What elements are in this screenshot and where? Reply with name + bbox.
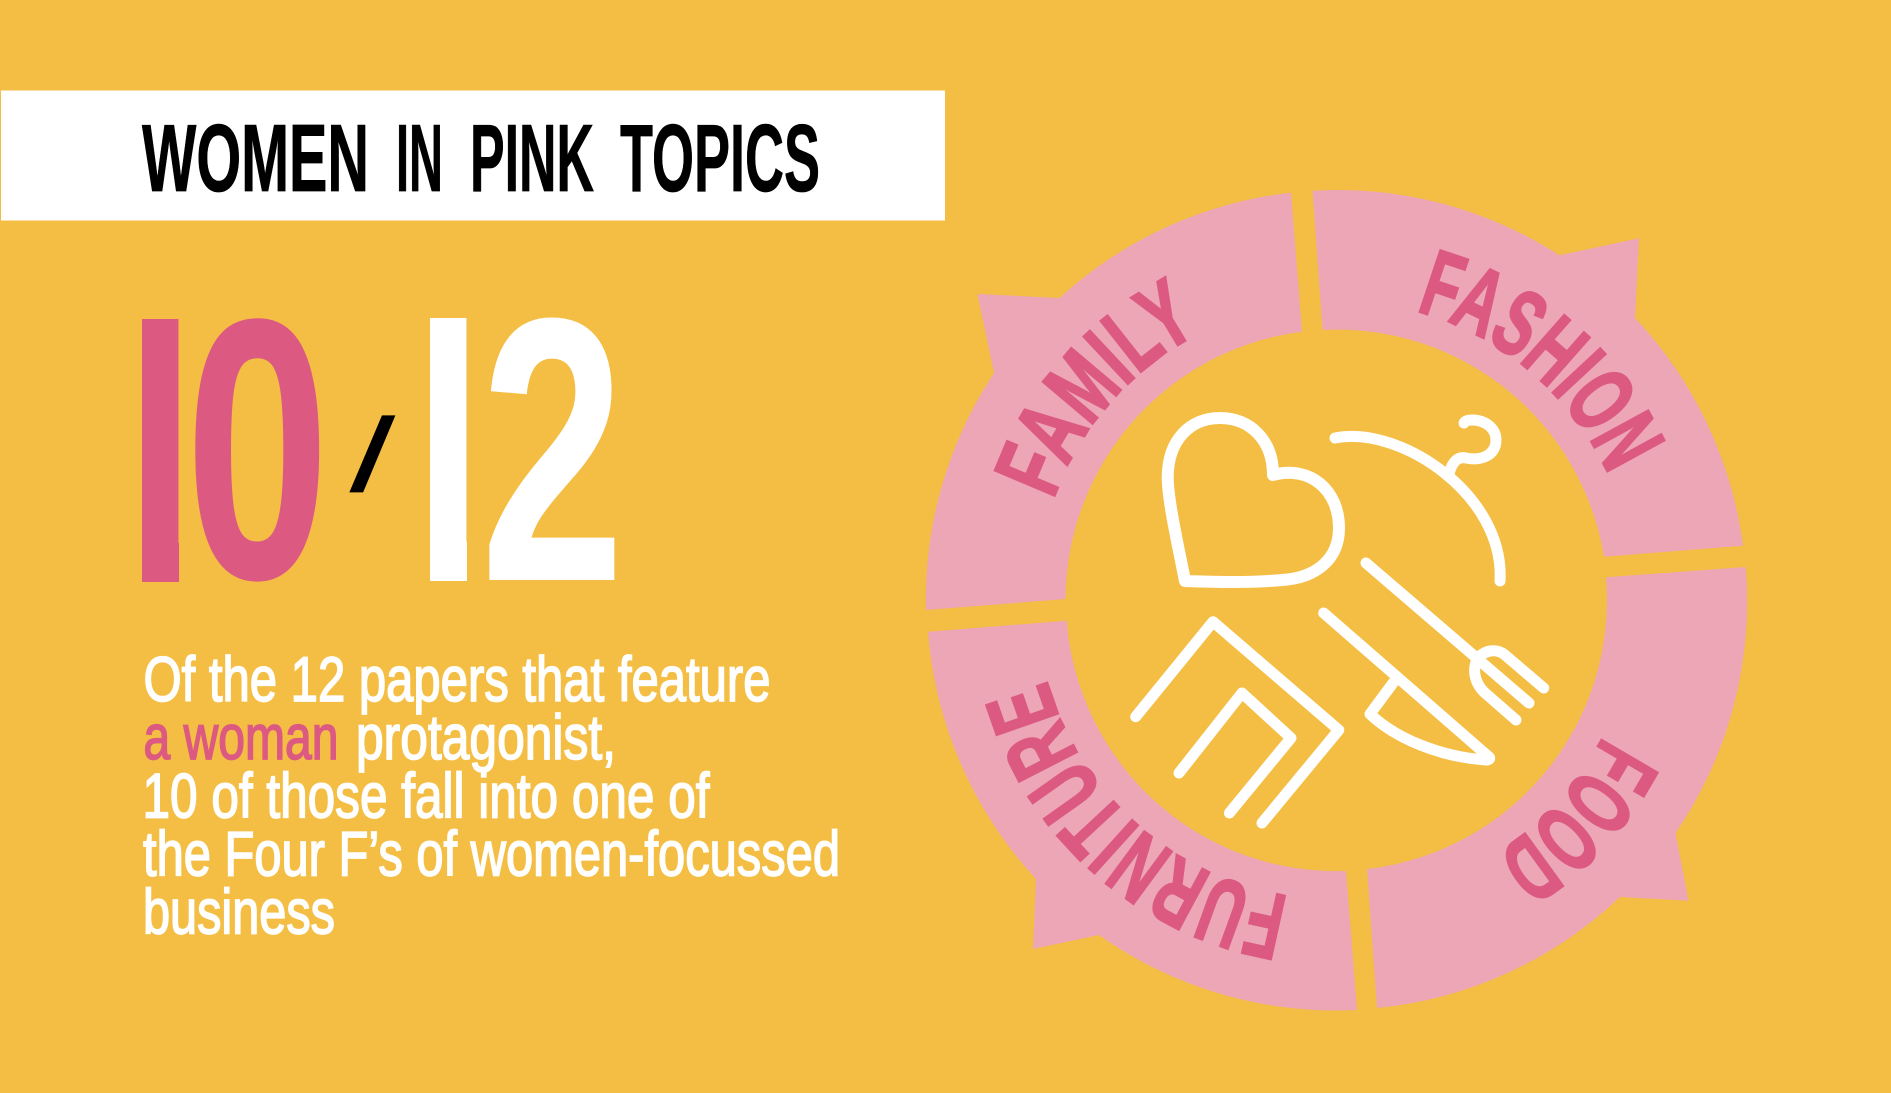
title: TOPICS xyxy=(620,105,820,212)
slash: / xyxy=(350,397,395,513)
number 10 xyxy=(142,318,320,582)
icon: chair xyxy=(1136,622,1339,823)
title banner xyxy=(1,90,945,220)
description text xyxy=(142,645,840,948)
segment: furniture xyxy=(928,620,1357,1010)
title: IN xyxy=(396,105,443,212)
description text: business xyxy=(143,878,335,948)
segment: furniture: FURNITURE xyxy=(984,681,1286,960)
description text: protagonist, xyxy=(356,703,616,773)
description text: 10 of those fall into one of xyxy=(142,762,710,832)
number 12: 1 xyxy=(358,233,521,663)
title: PINK xyxy=(470,105,594,212)
number 10: 0 xyxy=(185,242,330,658)
icon: heart xyxy=(1168,418,1339,582)
number 12 xyxy=(430,318,614,581)
segment: family xyxy=(926,192,1302,610)
segment: food: FOOD xyxy=(1506,738,1660,898)
number 12: 2 xyxy=(480,241,625,660)
big number: 10 of 12 xyxy=(142,318,614,582)
description text: Of the 12 papers that feature xyxy=(144,645,770,715)
icon: knife xyxy=(1324,613,1490,760)
ring diagram: four F's xyxy=(926,190,1748,1010)
description text: the Four F’s of women-focussed xyxy=(143,820,840,890)
segment: fashion: FASHION xyxy=(1418,248,1666,473)
segment: family: FAMILY xyxy=(993,275,1187,497)
icon: hanger xyxy=(1335,420,1500,581)
infographic canvas xyxy=(1,90,1748,1010)
number 10: 1 xyxy=(70,234,233,664)
segment: fashion xyxy=(1312,190,1743,557)
icon: fork xyxy=(1366,563,1544,720)
description text: a woman xyxy=(144,703,338,773)
segment: food xyxy=(1367,567,1748,1008)
title xyxy=(142,105,820,212)
title: WOMEN xyxy=(142,105,369,212)
